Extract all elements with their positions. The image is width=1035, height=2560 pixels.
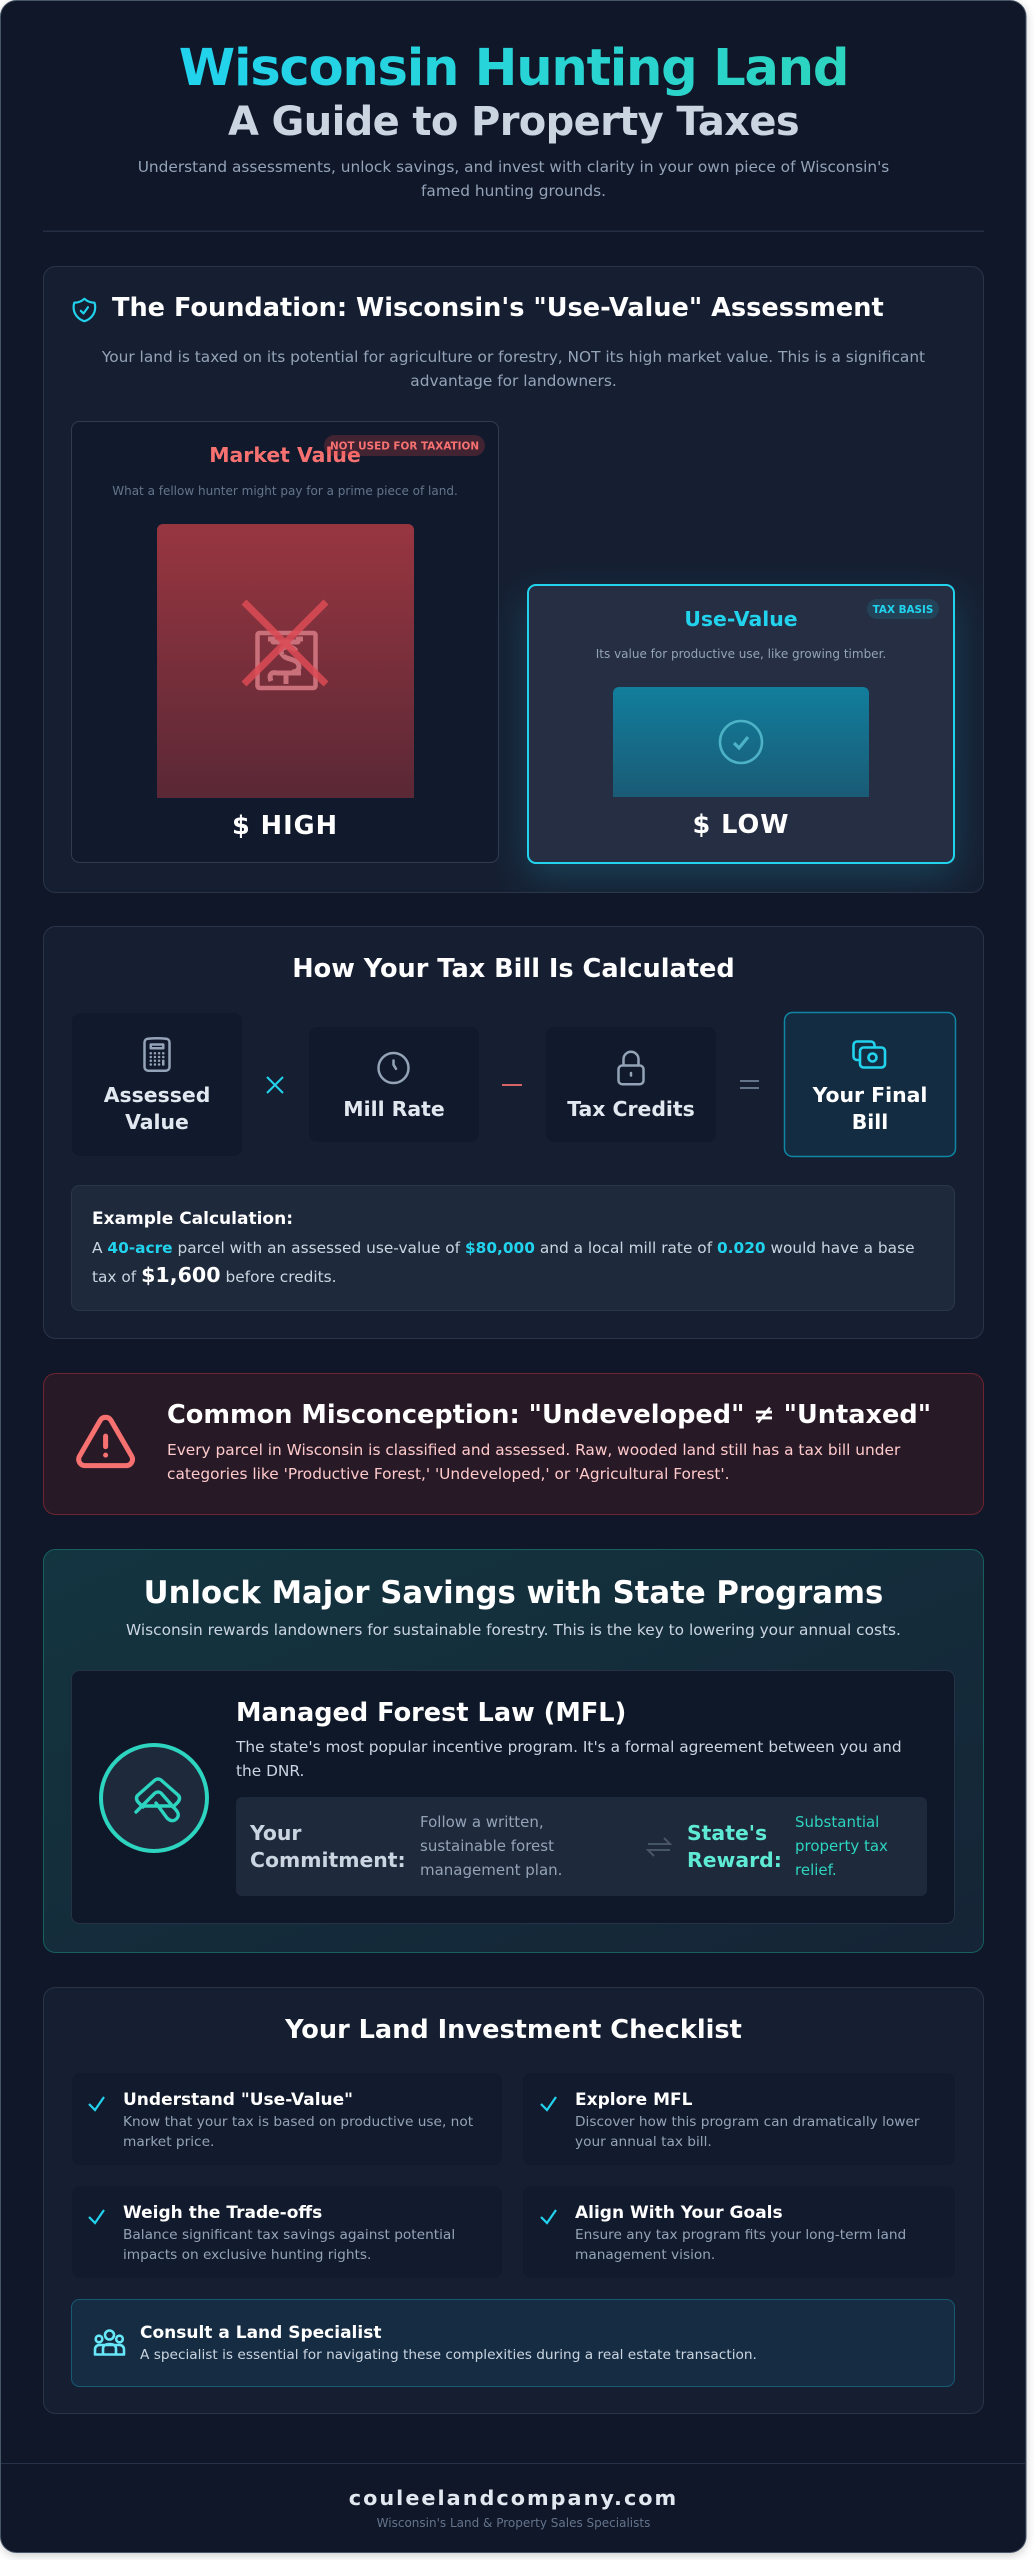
item: explore mfl: Explore MFL <box>575 2090 693 2110</box>
step: final bill <box>784 1012 956 1156</box>
item: understand use-value: Understand "Use-Value" <box>123 2090 353 2110</box>
step: final bill: Bill <box>852 1110 888 1134</box>
market value heading: Market Value <box>209 443 361 467</box>
use value heading: Use-Value <box>684 607 798 631</box>
badge: not used for taxation <box>324 435 485 456</box>
icon: people group <box>95 2330 124 2354</box>
step: assessed value: Value <box>125 1110 189 1134</box>
footer <box>1 2463 1026 2530</box>
callout: consult a land specialist: A specialist is essential for navigating these complexities during a real estate transaction. <box>140 2347 757 2363</box>
item: understand use-value <box>72 2073 502 2165</box>
card: market value <box>72 422 498 862</box>
icon: lock <box>619 1052 644 1084</box>
item: align with goals: management vision. <box>575 2247 715 2263</box>
example calculation: tax of $1,600 before credits. <box>92 1263 337 1287</box>
card: managed forest law <box>72 1670 954 1924</box>
panel: common misconception <box>44 1374 984 1514</box>
callout: consult a land specialist: Consult a Land Specialist <box>140 2323 381 2343</box>
title: Wisconsin Hunting Land <box>179 38 848 98</box>
footer brand: couleelandcompany.com <box>349 2486 678 2510</box>
step: mill rate: Mill Rate <box>343 1097 445 1121</box>
item: understand use-value: Know that your tax is based on productive use, not <box>123 2114 474 2130</box>
footer tagline: Wisconsin's Land & Property Sales Specialists <box>377 2516 650 2530</box>
step: assessed value <box>72 1013 242 1156</box>
item: explore mfl: your annual tax bill. <box>575 2134 712 2150</box>
state's reward: Substantial <box>795 1813 879 1831</box>
panel: tax bill calculation <box>44 926 984 1338</box>
your commitment: sustainable forest <box>420 1837 554 1855</box>
step: tax credits <box>546 1027 716 1142</box>
icon: clock <box>379 1053 409 1083</box>
icon: shield check <box>74 299 95 321</box>
your commitment: management plan. <box>420 1861 562 1879</box>
item: weigh trade-offs: impacts on exclusive hunting rights. <box>123 2247 371 2263</box>
state's reward <box>687 1813 888 1879</box>
foundation description: Your land is taxed on its potential for agriculture or forestry, NOT its high market value. This is a significant <box>101 348 925 366</box>
header <box>138 38 889 200</box>
step: tax credits: Tax Credits <box>567 1097 695 1121</box>
callout: consult a land specialist <box>72 2300 954 2386</box>
market value description: What a fellow hunter might pay for a prime piece of land. <box>112 484 458 498</box>
badge: not used for taxation: NOT USED FOR TAXATION <box>330 440 479 452</box>
item: understand use-value: market price. <box>123 2134 214 2150</box>
misconception heading: Common Misconception: "Undeveloped" ≠ "Untaxed" <box>167 1400 931 1430</box>
icon: forest badge <box>101 1745 207 1851</box>
icon: warning triangle <box>79 1417 133 1466</box>
icon: exchange arrows <box>648 1838 670 1856</box>
subtitle: A Guide to Property Taxes <box>228 99 799 145</box>
icon: crossed-out dollar <box>244 602 326 688</box>
use value amount: $ LOW <box>692 810 790 840</box>
state's reward: Reward: <box>687 1848 782 1872</box>
step: assessed value: Assessed <box>104 1083 210 1107</box>
panel: investment checklist <box>44 1988 984 2414</box>
your commitment: Commitment: <box>250 1848 406 1872</box>
intro text: Understand assessments, unlock savings, and invest with clarity in your own piece of Wisconsin's <box>138 158 889 176</box>
savings heading: Unlock Major Savings with State Programs <box>144 1575 883 1611</box>
badge: tax basis: TAX BASIS <box>873 604 933 616</box>
item: weigh trade-offs: Weigh the Trade-offs <box>123 2203 322 2223</box>
state's reward: relief. <box>795 1861 837 1879</box>
icon: calculator <box>145 1038 170 1071</box>
step: final bill: Your Final <box>812 1083 927 1107</box>
checklist heading: Your Land Investment Checklist <box>284 2015 742 2045</box>
operator: minus <box>502 1084 522 1086</box>
item: explore mfl <box>523 2073 955 2165</box>
item: align with goals <box>523 2186 955 2278</box>
commitment and reward <box>236 1797 927 1896</box>
example calculation: A 40-acre parcel with an assessed use-value of $80,000 and a local mill rate of 0.020 would have a base <box>92 1239 915 1257</box>
your commitment: Follow a written, <box>420 1813 544 1831</box>
your commitment: Your <box>249 1821 301 1845</box>
step: mill rate <box>309 1027 479 1142</box>
bar: low use value <box>613 687 869 797</box>
misconception text: Every parcel in Wisconsin is classified and assessed. Raw, wooded land still has a tax bill under <box>167 1441 901 1459</box>
mfl heading: Managed Forest Law (MFL) <box>236 1698 626 1728</box>
misconception text <box>167 1441 901 1483</box>
foundation description <box>101 348 925 390</box>
bar: high market value <box>157 524 414 798</box>
mfl description: the DNR. <box>236 1762 304 1780</box>
your commitment <box>249 1813 562 1879</box>
savings intro: Wisconsin rewards landowners for sustainable forestry. This is the key to lowering your annual costs. <box>126 1621 901 1639</box>
operator: equals <box>740 1081 759 1088</box>
item: explore mfl: Discover how this program can dramatically lower <box>575 2114 920 2130</box>
market value amount: $ HIGH <box>232 811 338 841</box>
example calculation: Example Calculation: <box>92 1209 293 1229</box>
state's reward: property tax <box>795 1837 888 1855</box>
use value description: Its value for productive use, like growing timber. <box>596 647 886 661</box>
intro text: famed hunting grounds. <box>421 182 606 200</box>
panel: state savings programs <box>44 1550 984 1952</box>
card: use value <box>528 585 954 863</box>
item: weigh trade-offs <box>72 2186 502 2278</box>
panel: use-value foundation <box>44 266 984 892</box>
example calculation <box>72 1186 954 1310</box>
item: align with goals: Ensure any tax program fits your long-term land <box>575 2227 906 2243</box>
misconception text: categories like 'Productive Forest,' 'Undeveloped,' or 'Agricultural Forest'. <box>167 1465 729 1483</box>
state's reward: State's <box>687 1821 767 1845</box>
mfl description <box>235 1738 902 1780</box>
item: align with goals: Align With Your Goals <box>575 2203 783 2223</box>
intro text <box>138 158 889 200</box>
icon: banknotes <box>854 1042 885 1068</box>
icon: check circle <box>720 721 762 763</box>
item: weigh trade-offs: Balance significant tax savings against potential <box>123 2227 455 2243</box>
section heading: The Foundation: Wisconsin's "Use-Value" Assessment <box>112 293 884 323</box>
mfl description: The state's most popular incentive program. It's a formal agreement between you and <box>235 1738 902 1756</box>
operator: multiply <box>267 1077 283 1093</box>
calculation heading: How Your Tax Bill Is Calculated <box>292 954 735 984</box>
foundation description: advantage for landowners. <box>410 372 617 390</box>
badge: tax basis <box>867 599 939 619</box>
